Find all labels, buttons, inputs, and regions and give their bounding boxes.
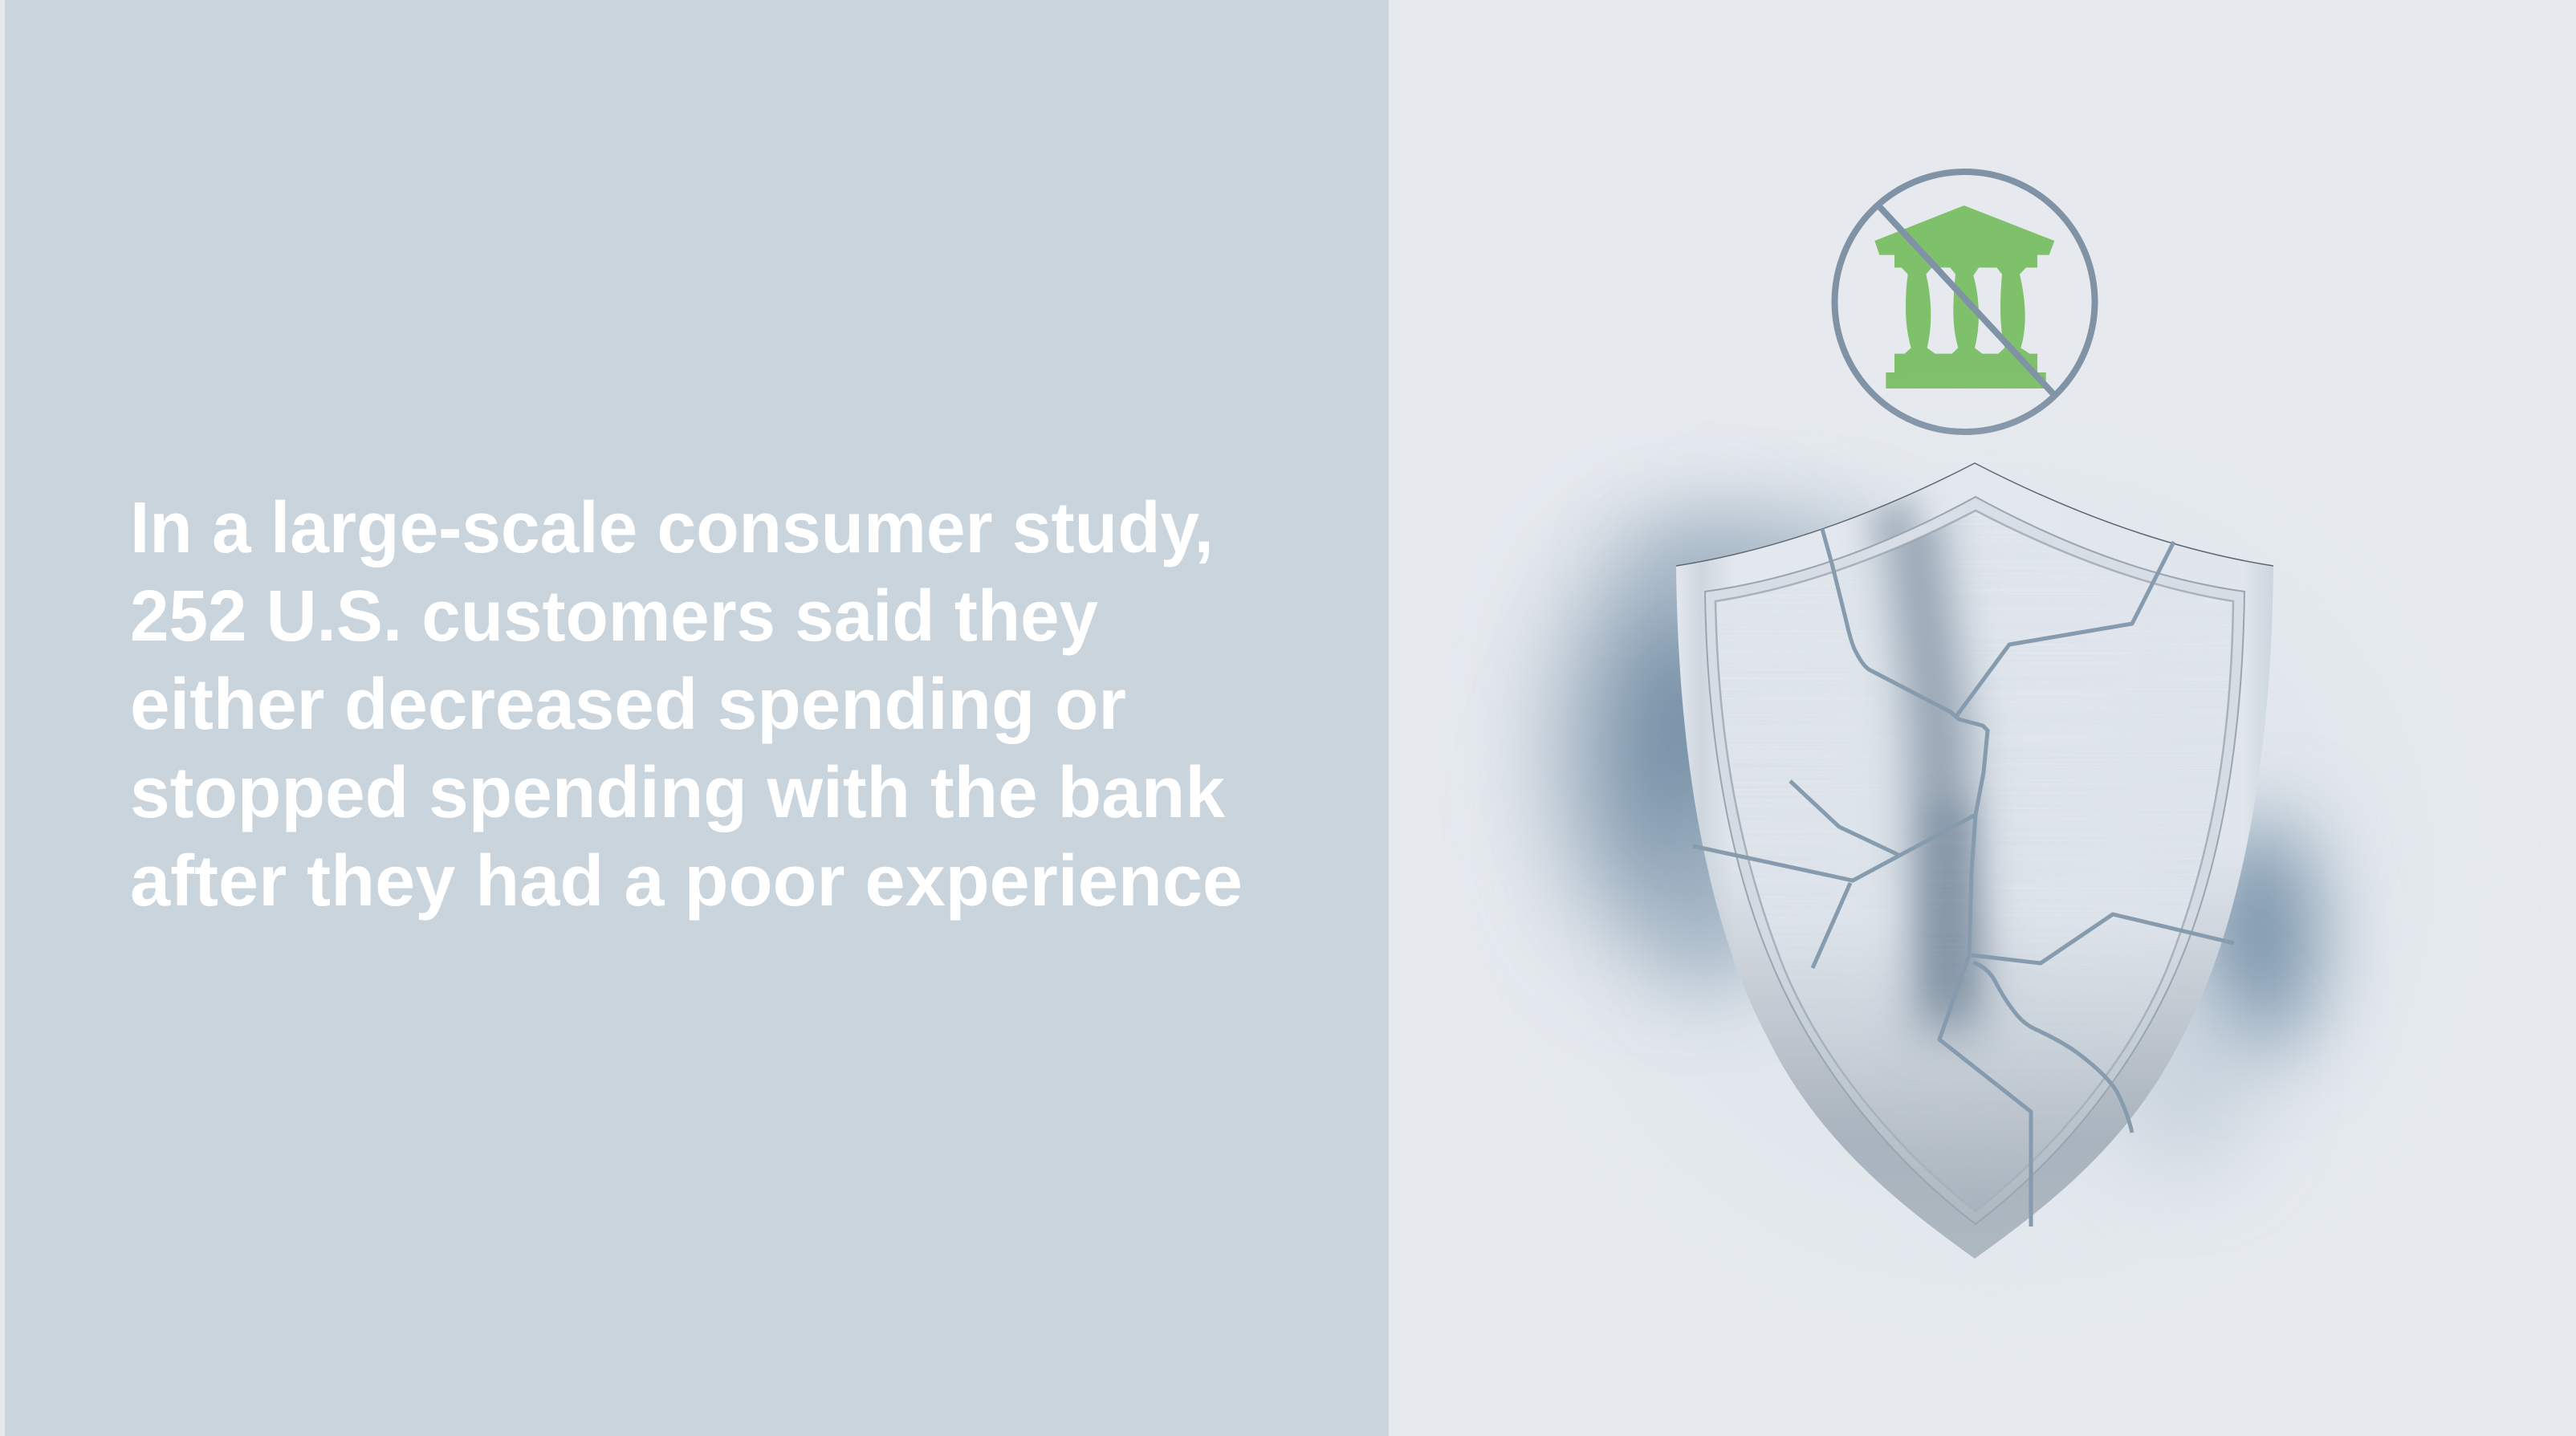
icon: prohibition ring and slash	[1835, 172, 2095, 432]
text block: study statement: either decreased spending or	[130, 665, 1126, 745]
shield	[1670, 458, 2280, 1260]
shield inner panel	[1715, 511, 2233, 1211]
shield rim	[1676, 463, 2273, 1259]
shadow behind shield	[1573, 490, 2408, 1260]
icon: bank building	[1874, 205, 2054, 388]
cracks in shield	[1693, 529, 2234, 1226]
text block: study statement: after they had a poor experience	[130, 841, 1243, 921]
shield brushed metal and dark band	[1856, 517, 2015, 1060]
shield inner rim bevel	[1705, 497, 2244, 1224]
icon: bank with prohibition sign	[1835, 172, 2095, 432]
text block: study statement: 252 U.S. customers said they	[130, 576, 1098, 657]
panel: right background	[1391, 0, 2576, 1436]
text block: study statement	[130, 488, 1243, 921]
left edge strip	[0, 0, 5, 1436]
text block: study statement: stopped spending with the bank	[130, 753, 1226, 833]
text block: study statement: In a large-scale consumer study,	[130, 488, 1214, 568]
shield top edge line	[1676, 463, 2273, 566]
panel: left text background	[5, 0, 1389, 1436]
